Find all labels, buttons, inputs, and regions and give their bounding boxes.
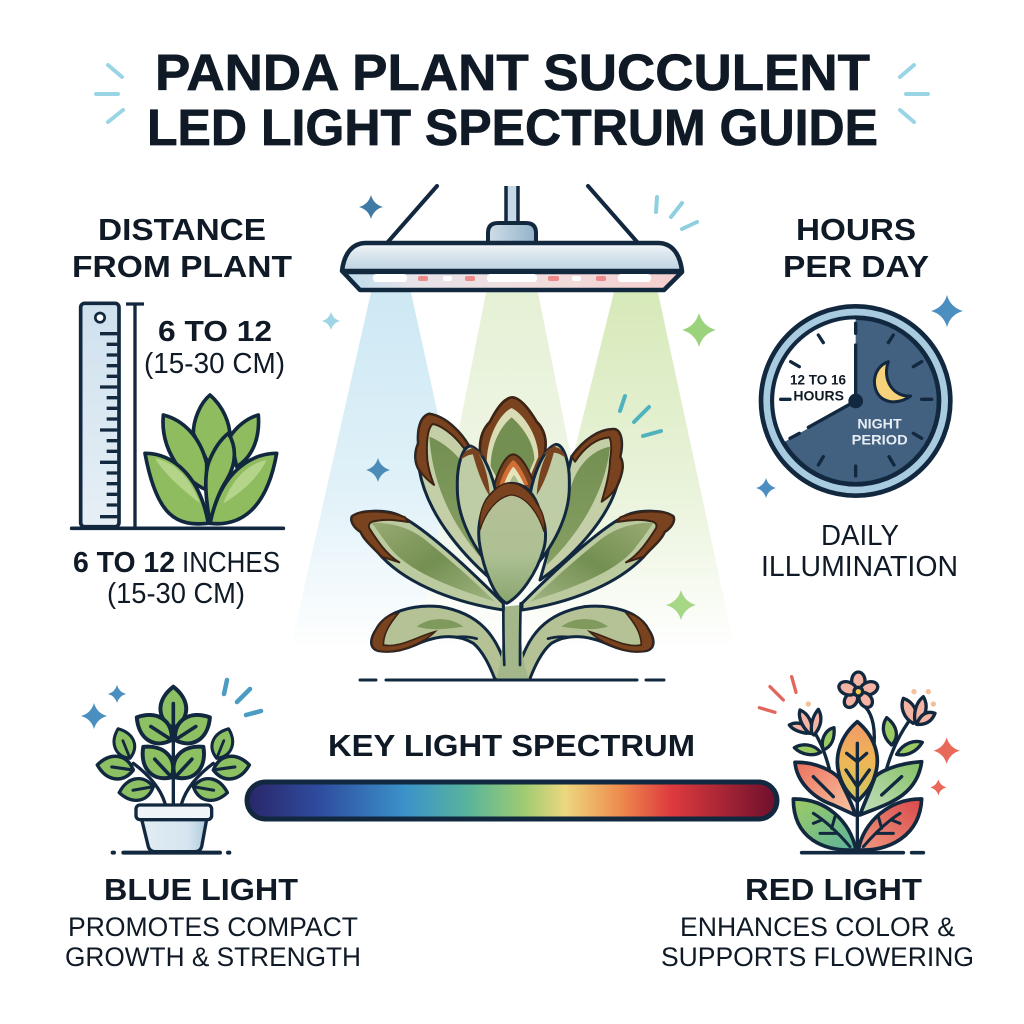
lamp mount bbox=[488, 223, 536, 243]
ground line under main plant bbox=[360, 678, 664, 682]
LEDs bbox=[373, 274, 651, 282]
heading: FROM PLANT bbox=[72, 249, 292, 284]
heading bbox=[783, 212, 929, 284]
ruler ticks bbox=[100, 334, 117, 517]
icon: LED grow lamp bbox=[342, 186, 682, 290]
heading: DISTANCE bbox=[98, 212, 266, 247]
center orange leaf bbox=[837, 722, 877, 805]
clock hands bbox=[808, 345, 856, 427]
caption: ILLUMINATION bbox=[761, 551, 958, 583]
title: PANDA PLANT SUCCULENT bbox=[155, 44, 870, 101]
icon: clock bbox=[761, 306, 950, 496]
coral leaf bbox=[795, 762, 855, 815]
day label bbox=[790, 371, 846, 404]
description: SUPPORTS FLOWERING bbox=[661, 942, 974, 972]
small leaves bbox=[794, 718, 922, 755]
night label: NIGHT bbox=[857, 415, 902, 431]
description bbox=[65, 912, 361, 972]
ground line bbox=[802, 847, 923, 858]
day label: 12 TO 16 bbox=[790, 371, 846, 387]
icon: plant rays bbox=[620, 396, 661, 436]
distance caption bbox=[73, 547, 280, 610]
icon: potted plant bbox=[96, 687, 251, 853]
sparkles bbox=[756, 295, 963, 498]
stem bbox=[497, 603, 529, 679]
bottom right leaf bbox=[520, 606, 653, 679]
bottom left leaf bbox=[371, 606, 505, 679]
blue beam bbox=[290, 288, 490, 650]
panel: red light bbox=[661, 672, 974, 972]
night label bbox=[852, 415, 908, 447]
left bud bbox=[789, 709, 821, 735]
sparkles bbox=[930, 737, 960, 795]
center small leaf bbox=[494, 454, 535, 500]
icon: title rays right bbox=[900, 65, 928, 122]
distance caption: 6 TO 12 bbox=[73, 547, 175, 579]
icon: ruler and plant bbox=[72, 303, 283, 528]
side left leaf bbox=[352, 511, 503, 610]
panel: distance from plant bbox=[72, 212, 292, 610]
middle left leaf bbox=[457, 446, 500, 573]
ruler hole bbox=[95, 313, 105, 322]
lamp hanger wires bbox=[387, 186, 638, 243]
caption bbox=[761, 520, 958, 583]
lamp lower tray bbox=[343, 272, 682, 290]
light beams bbox=[290, 288, 735, 650]
label: RED LIGHT bbox=[745, 872, 922, 907]
lamp stem bbox=[506, 186, 518, 224]
side right leaf bbox=[522, 511, 674, 610]
center green beam bbox=[415, 288, 610, 650]
baseline bbox=[72, 523, 283, 534]
label: BLUE LIGHT bbox=[104, 872, 298, 907]
heading bbox=[72, 212, 292, 284]
flower stems bbox=[807, 707, 913, 772]
back right leaf bbox=[540, 429, 622, 580]
pollen dots bbox=[806, 689, 936, 707]
icon: moon bbox=[874, 362, 911, 402]
icon: title rays left bbox=[96, 65, 123, 122]
caption: DAILY bbox=[821, 520, 899, 552]
description: PROMOTES COMPACT bbox=[68, 912, 358, 942]
pot body bbox=[142, 819, 207, 852]
measurement line bbox=[126, 304, 144, 527]
back center leaf bbox=[480, 397, 546, 500]
distance caption: INCHES bbox=[182, 547, 280, 579]
bottom left leaf bbox=[793, 799, 856, 850]
title: LED LIGHT SPECTRUM GUIDE bbox=[147, 99, 878, 156]
panel: hours per day bbox=[756, 212, 963, 583]
lamp upper body bbox=[342, 243, 682, 271]
main panda plant bbox=[352, 397, 674, 679]
middle right leaf bbox=[527, 444, 569, 572]
panel: blue light bbox=[65, 680, 361, 972]
sparkle decorations bbox=[322, 195, 716, 620]
night label: PERIOD bbox=[852, 431, 908, 447]
bottom right leaf bbox=[858, 799, 922, 850]
description: GROWTH & STRENGTH bbox=[65, 942, 361, 972]
pot rim bbox=[136, 805, 212, 820]
right bud bbox=[902, 697, 935, 724]
clock face daylight sector bbox=[774, 319, 856, 442]
plant stems bbox=[133, 730, 213, 803]
clock face night bbox=[772, 318, 939, 484]
day label: HOURS bbox=[793, 388, 844, 404]
green upper right leaf bbox=[860, 762, 922, 815]
heading: PER DAY bbox=[783, 249, 929, 284]
right green beam bbox=[525, 288, 735, 650]
small succulent bbox=[145, 395, 277, 524]
plant leaves bbox=[96, 687, 251, 803]
clock ring bbox=[761, 306, 950, 496]
distance caption: (15-30 CM) bbox=[107, 578, 245, 610]
ground line bbox=[113, 847, 229, 859]
description bbox=[661, 912, 974, 972]
icon: flowering plant bbox=[759, 672, 960, 853]
heading: HOURS bbox=[796, 212, 916, 247]
front center leaf bbox=[479, 483, 546, 603]
icon: lamp rays bbox=[656, 197, 697, 229]
rays bbox=[224, 680, 261, 715]
back left leaf bbox=[416, 414, 500, 587]
ruler bbox=[81, 303, 119, 527]
spectrum bar bbox=[247, 782, 777, 819]
distance value: (15-30 CM) bbox=[144, 348, 285, 380]
sparkles bbox=[81, 685, 126, 729]
description: ENHANCES COLOR & bbox=[680, 912, 955, 942]
rays bbox=[759, 677, 796, 712]
clock hub bbox=[848, 394, 863, 408]
distance value: 6 TO 12 bbox=[158, 316, 272, 348]
heading: key light spectrum: KEY LIGHT SPECTRUM bbox=[328, 728, 695, 763]
center stem bbox=[852, 798, 862, 852]
distance value bbox=[144, 316, 285, 380]
title bbox=[147, 44, 878, 156]
clock ticks bbox=[781, 323, 932, 476]
top flower bbox=[837, 672, 880, 710]
